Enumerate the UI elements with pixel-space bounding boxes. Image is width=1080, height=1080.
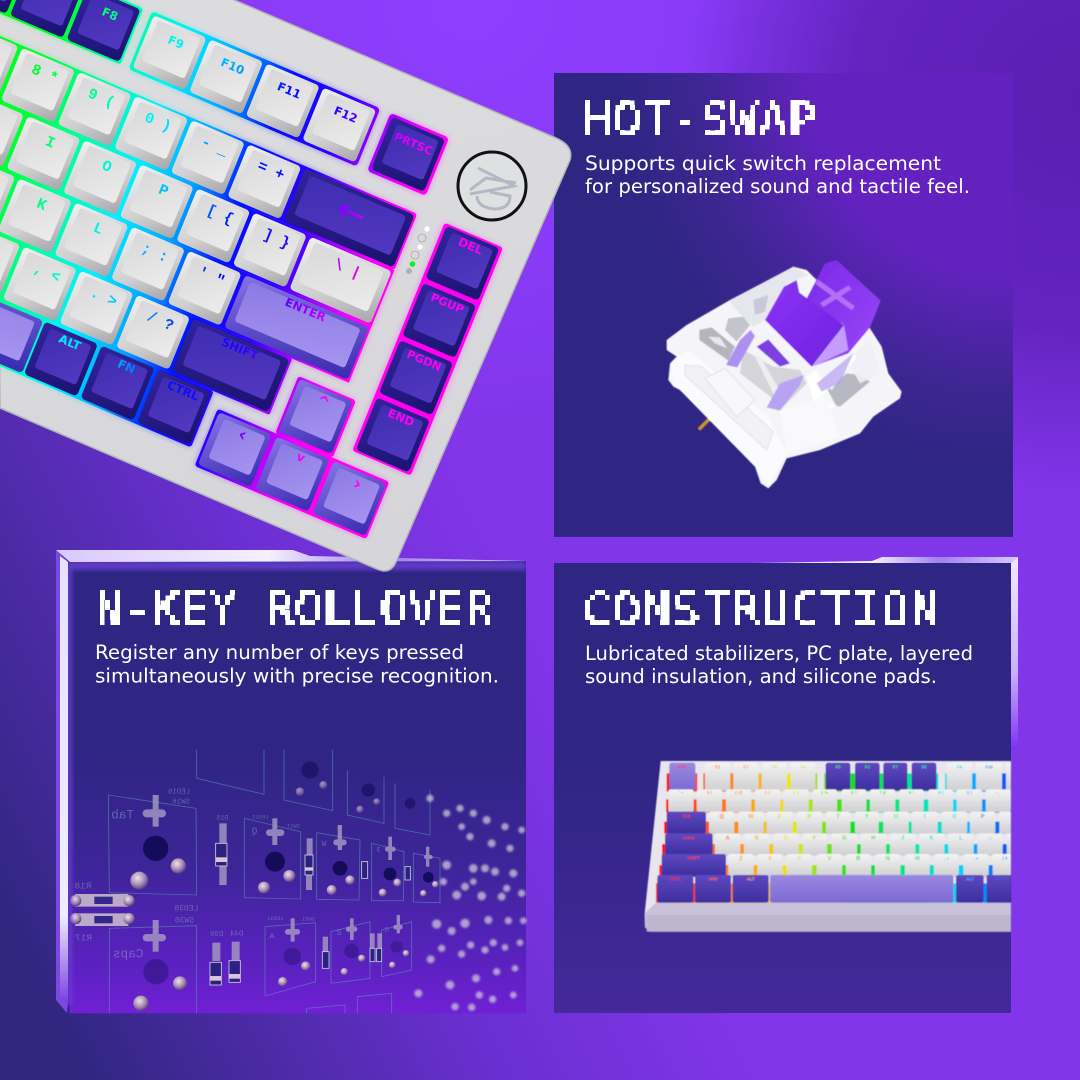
key legends: V [827, 856, 831, 862]
key legends: P [156, 181, 171, 201]
key legends: H [871, 835, 875, 841]
keyboard case [0, 0, 571, 571]
key legends: / ? [1002, 856, 1008, 861]
key legends: CTRL [165, 378, 201, 404]
key legends: F [813, 835, 817, 841]
key legends: 0 ) [967, 790, 972, 795]
key legends: ^ [314, 391, 333, 413]
panel: hot-swap [554, 73, 1013, 537]
key legends: T [836, 814, 840, 820]
mirrored board silkscreen labels: D44 [230, 930, 243, 938]
key legends: F3 [772, 764, 777, 769]
icon: mechanical switch [667, 260, 902, 488]
image: keyboard front view [645, 761, 1011, 932]
text: hot-swap description: Supports quick switch replacement [585, 152, 941, 175]
key legends: Y [865, 814, 869, 820]
key legends: 6 ^ [851, 790, 858, 795]
mirrored board silkscreen labels: SW16 [172, 798, 190, 806]
key legends: Z [739, 856, 743, 862]
mirrored board silkscreen labels: SW17 [287, 823, 300, 829]
key legends: F10 [985, 764, 993, 769]
resistors r18 and r17 [70, 894, 135, 926]
key legends: = + [255, 157, 287, 184]
key legends: F1 [715, 764, 721, 769]
key legends: WIN [709, 876, 717, 881]
key legends: E [778, 814, 782, 820]
heading: n-key rollover: N-KEY ROLLOVER [95, 582, 493, 636]
key legends: 5 % [821, 790, 829, 795]
heading: construction: CONSTRUCTION [583, 583, 939, 637]
key legends: PGDN [405, 348, 443, 374]
key legends: O [952, 814, 957, 820]
key legends: I [43, 133, 58, 153]
key legends: F7 [893, 764, 898, 769]
blurred distant switch contacts [414, 795, 527, 1011]
key legends: ; : [139, 239, 171, 267]
key legends: ALT [747, 876, 755, 881]
mirrored board silkscreen labels: LED31 [267, 916, 283, 922]
key legends: 0 ) [142, 109, 174, 136]
key legends: L [90, 219, 106, 239]
key legends: G [842, 835, 847, 841]
key legends: ] } [260, 225, 293, 253]
text: hot-swap description: for personalized sound and tactile feel. [585, 175, 970, 198]
mirrored board silkscreen labels: Q [251, 825, 257, 836]
key legends: F10 [219, 55, 246, 78]
key legends: [ { [204, 201, 236, 229]
key legends: ALT [966, 876, 974, 881]
key legends: , < [31, 260, 63, 287]
key legends: TAB [682, 813, 691, 818]
key layout [0, 0, 533, 546]
key legends: F4 [800, 764, 806, 769]
key legends: ALT [57, 332, 83, 353]
mirrored board silkscreen labels: Tab [111, 807, 134, 822]
key legends: K [34, 195, 50, 215]
text: construction description: sound insulation, and silicone pads. [585, 665, 937, 688]
glowing frame: top and right edge [754, 557, 1018, 750]
text: n-key rollover description: simultaneously with precise recognition. [95, 664, 499, 688]
knob [458, 152, 526, 220]
key legends: F9 [957, 764, 962, 769]
key legends: - _ [198, 133, 231, 161]
key legends: ' " [195, 264, 227, 291]
key legends: D [784, 835, 788, 841]
backlight rim [0, 0, 533, 546]
key legends: v [295, 449, 307, 465]
mirrored board silkscreen labels: SW31 [302, 917, 315, 923]
key legends: F8 [921, 764, 927, 769]
key legends: 7 & [879, 790, 886, 795]
key legends: 9 ( [85, 85, 117, 112]
keyboard: angled top view [0, 0, 571, 571]
keyboard case [645, 761, 1011, 932]
mirrored board silkscreen labels: D30 [210, 931, 223, 939]
mirrored board silkscreen labels: D [385, 926, 389, 934]
mirrored board silkscreen labels: S [337, 929, 342, 938]
mirrored board silkscreen labels: R17 [75, 933, 92, 944]
mirrored board silkscreen labels: R18 [75, 881, 91, 892]
key legends: - _ [996, 790, 1001, 795]
key legends: X [768, 856, 772, 862]
key legends: 3 # [765, 790, 771, 795]
key legends: A [726, 835, 730, 841]
key legends: F5 [835, 764, 841, 769]
key legends: \ | [331, 256, 363, 283]
key legends [0, 0, 517, 507]
wide gap case fill [697, 770, 945, 789]
key legends: ENTER [283, 295, 328, 325]
key legends: FN [996, 876, 1002, 881]
keycaps [657, 763, 1011, 903]
key legends: 2 @ [735, 790, 743, 795]
key legends: FN [116, 357, 137, 376]
key legends: N [886, 856, 890, 862]
mirrored board silkscreen labels: D15 [216, 813, 228, 821]
key legends: SHIFT [687, 855, 700, 860]
key legends: SHIFT [219, 335, 260, 363]
key legends: U [894, 814, 898, 820]
key legends: . > [974, 856, 979, 861]
text: construction description [585, 642, 973, 688]
key legends: K [930, 835, 935, 841]
key legends: 4 $ [793, 790, 800, 795]
mirrored board silkscreen labels: LED17 [252, 814, 268, 820]
key legends: . > [88, 284, 120, 311]
key legends: W [748, 814, 754, 820]
mirrored board silkscreen labels: E [377, 846, 381, 854]
key legends: F6 [865, 764, 870, 769]
key legends: M [915, 856, 920, 862]
key legends: R [807, 814, 811, 820]
key legends: CTRL [670, 876, 681, 881]
key legends: S [755, 835, 759, 841]
key legends: C [797, 856, 801, 862]
key legends: ESC [678, 764, 687, 769]
status indicators [406, 226, 430, 274]
text: n-key rollover description: Register any number of keys pressed [95, 641, 464, 664]
key legends: ‹ [235, 424, 250, 446]
key legends: ← [330, 189, 372, 237]
key legends: 9 ( [938, 790, 944, 795]
key legends: F2 [743, 764, 749, 769]
key legends: , < [944, 856, 949, 861]
mirrored board silkscreen labels: LED30 [174, 905, 198, 914]
key legends: B [856, 856, 860, 862]
glowing frame: top and left edge [56, 550, 528, 1013]
key legends: P [981, 814, 985, 820]
text: n-key rollover description [95, 641, 499, 688]
heading: hot-swap: HOT-SWAP [584, 93, 816, 147]
key legends: F9 [166, 33, 186, 52]
key legends: L [959, 835, 963, 841]
key legends: I [924, 814, 926, 820]
mirrored board silkscreen labels: LED16 [168, 788, 190, 796]
key legends: F8 [100, 4, 120, 24]
image: circuit board photo [69, 750, 527, 1013]
key legends [670, 764, 1008, 881]
panel: construction [554, 557, 1018, 1013]
key legends: ; : [988, 835, 993, 840]
key legends: › [350, 473, 365, 495]
key legends: / ? [144, 308, 176, 335]
key legends: 8 * [909, 790, 914, 795]
key legends: CAPS [683, 835, 695, 840]
key legends: ` ~ [678, 790, 684, 795]
key legends: O [99, 157, 114, 177]
key legends: 1 ! [707, 790, 712, 795]
panel: n-key rollover [56, 550, 528, 1013]
key legends: DEL [456, 235, 485, 258]
text: hot-swap description [585, 152, 970, 198]
mirrored board silkscreen labels: A [269, 931, 275, 941]
key legends: Q [719, 814, 724, 820]
key legends: F11 [275, 79, 303, 102]
mirrored board silkscreen labels: Caps [113, 946, 143, 961]
mirrored board silkscreen labels: SW30 [175, 917, 194, 926]
mirrored board silkscreen labels [75, 788, 389, 961]
key legends: PRTSC [392, 130, 434, 158]
backlight strips [656, 773, 1011, 903]
key legends: END [386, 406, 417, 430]
key legends: F12 [332, 103, 360, 126]
text: construction description: Lubricated stabilizers, PC plate, layered [585, 642, 973, 665]
key legends: PGUP [429, 291, 466, 316]
key legends: 8 * [29, 61, 61, 88]
keycaps [0, 0, 529, 542]
mirrored board silkscreen labels: W [322, 840, 327, 849]
key legends: J [901, 835, 904, 841]
